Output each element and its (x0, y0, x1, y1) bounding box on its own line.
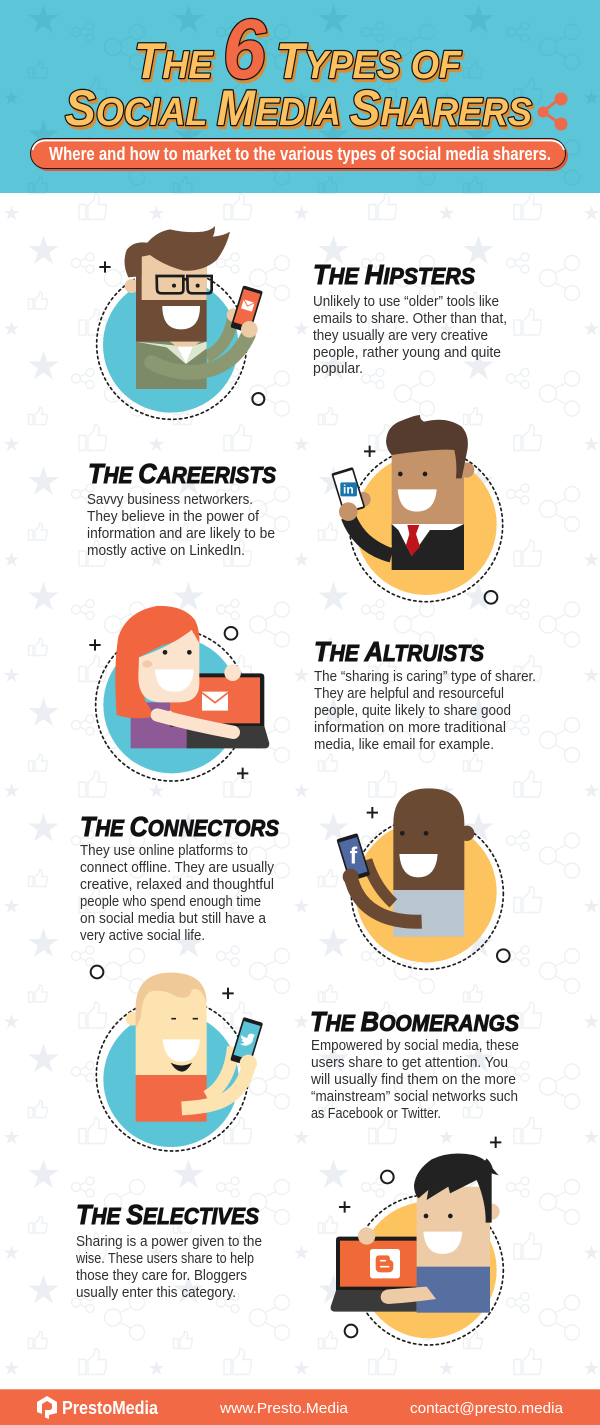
panel: The Boomerangs (91, 966, 520, 1151)
text: Boomerangs description: Empowered by social media, these (311, 1038, 519, 1054)
text: Hipsters description: emails to share. Other than that, (313, 311, 507, 327)
phone with LinkedIn icon (331, 467, 365, 514)
heading: The Selectives: THE SELECTIVES (76, 1199, 260, 1230)
heading: The Connectors: THE CONNECTORS (80, 811, 280, 842)
text: Selectives description: wise. These users share to help (75, 1251, 254, 1267)
illustration: careerist with phone (331, 415, 503, 604)
panel: The Selectives (75, 1137, 503, 1345)
text: Connectors description: people who spend enough time (80, 894, 261, 910)
text: Altruists description: people, quite likely to share good (314, 703, 511, 719)
panel: The Altruists (89, 606, 536, 781)
illustration: selective with laptop (331, 1137, 503, 1345)
text: Careerists description (87, 492, 275, 559)
phone with LinkedIn icon: in (343, 482, 354, 496)
text: Connectors description: connect offline. They are usually (80, 860, 275, 876)
text: Altruists description: They are helpful and resourceful (314, 686, 504, 702)
title: THE 6 TYPES OF (134, 2, 462, 96)
title: SOCIAL MEDIA SHARERS (65, 80, 532, 136)
illustration: altruist with laptop (89, 606, 269, 781)
panel: The Connectors (80, 788, 510, 969)
website: www.Presto.Media (219, 1400, 349, 1417)
panel: The Hipsters (97, 226, 507, 419)
logo wordmark: PrestoMedia (62, 1398, 159, 1418)
text: Selectives description (75, 1234, 262, 1301)
text: Selectives description: usually enter this category. (76, 1285, 236, 1301)
laptop with Blogger icon (331, 1237, 417, 1312)
text: Altruists description: information on more traditional (314, 720, 506, 736)
text: Altruists description (314, 669, 536, 753)
text: Selectives description: Sharing is a power given to the (76, 1234, 262, 1250)
phone with Facebook icon: f (350, 842, 358, 868)
text: Connectors description: on social media but still have a (80, 911, 267, 927)
text: Boomerangs description: “mainstream” social networks such (311, 1089, 518, 1105)
text: Selectives description: those they care for. Bloggers (76, 1268, 247, 1284)
text: Careerists description: information and are likely to be (87, 526, 275, 542)
subtitle pill (30, 138, 568, 171)
heading: The Hipsters: THE HIPSTERS (313, 259, 476, 290)
illustration: connector with phone (336, 788, 510, 969)
laptop with mail icon (170, 673, 269, 748)
text: Hipsters description: they usually are very creative (313, 328, 488, 344)
icon: share (538, 92, 568, 130)
text: Boomerangs description: as Facebook or Twitter. (311, 1106, 441, 1122)
phone with Facebook icon (336, 833, 370, 882)
text: Connectors description (80, 843, 275, 944)
glasses (157, 276, 212, 293)
heading: The Altruists: THE ALTRUISTS (314, 636, 485, 667)
text: Hipsters description (313, 294, 507, 377)
text: Hipsters description: people, rather young and quite (313, 345, 501, 361)
text: Boomerangs description: will usually find them on the more (310, 1072, 516, 1088)
text: Connectors description: very active social life. (80, 928, 205, 944)
illustration: hipster with phone (97, 226, 264, 419)
text: Boomerangs description (310, 1038, 519, 1122)
phone with mail icon (230, 285, 263, 333)
email: contact@presto.media (410, 1400, 564, 1417)
text: Hipsters description: Unlikely to use “older” tools like (313, 294, 499, 310)
text: Careerists description: Savvy business networkers. (87, 492, 253, 508)
text: Careerists description: They believe in the power of (87, 509, 260, 525)
text: Altruists description: media, like email for example. (314, 737, 494, 753)
text: Connectors description: creative, relaxed and thoughtful (80, 877, 274, 893)
title (65, 2, 532, 136)
icon: PrestoMedia logo (37, 1396, 57, 1419)
footer (0, 1389, 600, 1425)
text: Altruists description: The “sharing is caring” type of sharer. (314, 669, 536, 685)
text: Hipsters description: popular. (313, 361, 363, 377)
heading: The Boomerangs: THE BOOMERANGS (310, 1006, 520, 1037)
text: Connectors description: They use online platforms to (80, 843, 248, 859)
header banner (0, 0, 600, 193)
illustration: boomerang with phone (91, 966, 263, 1151)
text: Boomerangs description: users share to get attention. You (311, 1055, 508, 1071)
phone with Twitter icon (230, 1017, 263, 1066)
heading: The Careerists: THE CAREERISTS (88, 458, 277, 489)
text: Careerists description: mostly active on LinkedIn. (87, 543, 245, 559)
panel: The Careerists (87, 415, 503, 604)
